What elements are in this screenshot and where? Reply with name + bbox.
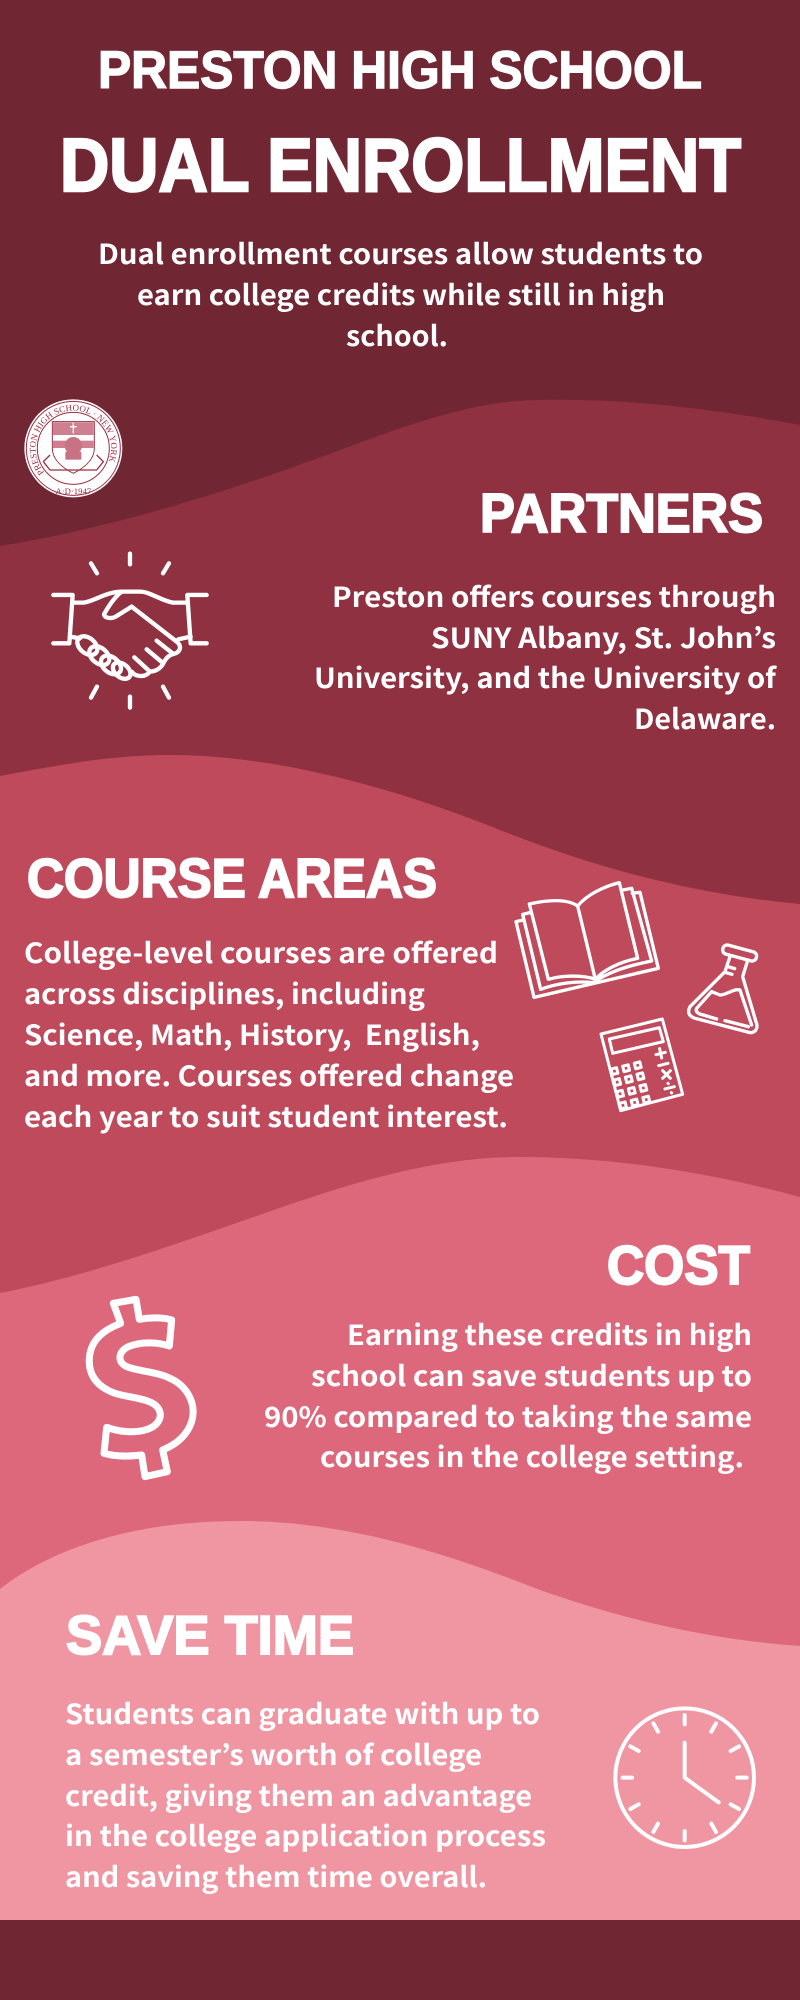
text: partners body: SUNY Albany, St. John’s	[431, 617, 776, 657]
text: course areas body: and more. Courses offered change	[24, 1055, 514, 1095]
text: cost body	[264, 1314, 752, 1476]
heading: cost: COST	[607, 1234, 750, 1296]
panel: course areas wave	[0, 755, 800, 1400]
text: course areas body: Science, Math, History, English,	[24, 1014, 480, 1054]
panel: cost wave	[0, 1157, 800, 1700]
text: save time body: in the college application process	[65, 1815, 546, 1855]
icon: open book	[516, 883, 658, 997]
text: cost body: 90% compared to taking the same	[264, 1396, 752, 1436]
text: course areas body: College-level courses are offered	[24, 932, 498, 972]
icon: calculator	[601, 1019, 683, 1111]
intro text: Dual enrollment courses allow students to	[98, 233, 703, 273]
text: partners body: University, and the University of	[314, 657, 778, 697]
icon: handshake	[53, 554, 207, 708]
icon: flask	[689, 944, 758, 1033]
panel: partners wave	[0, 400, 800, 1300]
school seal: PRESTON HIGH SCHOOL · NEW YORK	[30, 404, 117, 476]
text: cost body: school can save students up to	[311, 1355, 752, 1395]
text: save time body	[65, 1693, 546, 1896]
text: save time body: a semester’s worth of college	[65, 1734, 482, 1774]
heading: save time: SAVE TIME	[66, 1604, 354, 1666]
intro text: school.	[346, 315, 448, 355]
text: partners body: Delaware.	[634, 698, 776, 738]
heading: partners: PARTNERS	[480, 482, 763, 544]
text: save time body: and saving them time overall.	[65, 1856, 487, 1896]
dual enrollment heading: DUAL ENROLLMENT	[60, 123, 741, 207]
icon: clock	[615, 1708, 754, 1847]
text: course areas body: each year to suit student interest.	[24, 1096, 508, 1136]
school name heading: PRESTON HIGH SCHOOL	[98, 41, 702, 100]
text: cost body: Earning these credits in high	[347, 1314, 752, 1354]
title	[60, 41, 741, 207]
text: course areas body	[24, 932, 514, 1136]
school seal: A·D·1947	[56, 486, 92, 496]
panel: save time wave	[0, 1521, 800, 1920]
text: course areas body: across disciplines, including	[24, 973, 425, 1013]
text: partners body	[314, 576, 778, 738]
intro text	[98, 233, 703, 355]
text: save time body: credit, giving them an advantage	[65, 1775, 532, 1815]
text: partners body: Preston offers courses through	[332, 576, 776, 616]
text: cost body: courses in the college setting.	[320, 1436, 744, 1476]
text: save time body: Students can graduate with up to	[65, 1693, 540, 1733]
intro text: earn college credits while still in high	[137, 274, 665, 314]
heading: course areas: COURSE AREAS	[27, 847, 437, 909]
icon: dollar sign	[89, 1299, 193, 1477]
